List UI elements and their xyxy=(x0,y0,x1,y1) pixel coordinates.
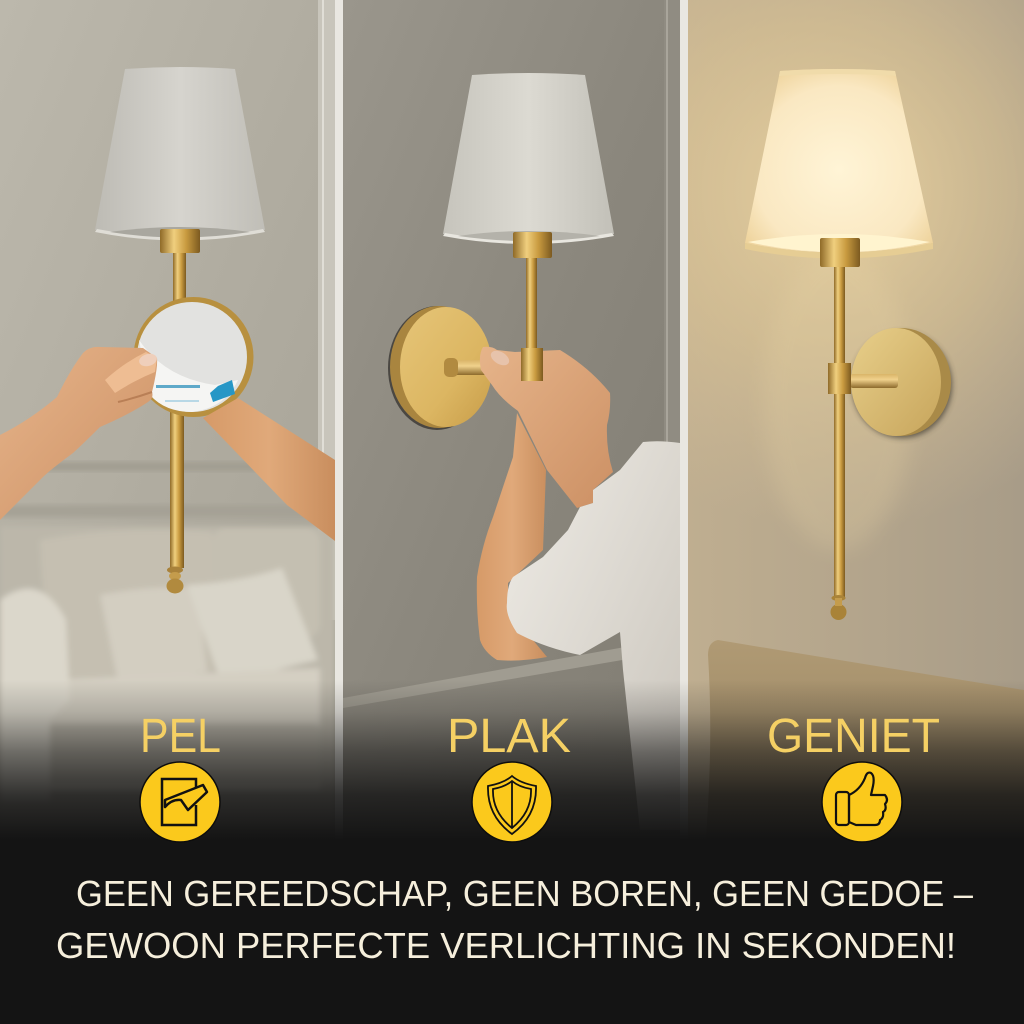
lamp 3 wall plate xyxy=(828,328,952,438)
label: PEL: PEL xyxy=(140,710,221,763)
panel: step 2 stick xyxy=(343,0,680,860)
icon: thumbs up xyxy=(822,762,902,842)
lamp 1 fixture rod xyxy=(160,229,200,594)
panel: step 1 peel xyxy=(0,0,335,860)
lamp 2 fixture rod xyxy=(513,232,552,350)
divider right xyxy=(680,0,688,860)
icon: shield xyxy=(472,762,552,842)
right arm xyxy=(203,398,335,541)
dark bottom band xyxy=(0,680,1024,1024)
forearm xyxy=(477,413,547,661)
clamp collar xyxy=(521,348,543,381)
lamp 3 fixture rod xyxy=(820,238,860,620)
wall plate xyxy=(388,306,495,430)
tagline xyxy=(56,873,973,966)
tagline: GEWOON PERFECTE VERLICHTING IN SEKONDEN! xyxy=(56,925,956,966)
icon: peel sticker xyxy=(140,762,220,842)
shirt xyxy=(507,441,680,830)
label: GENIET: GENIET xyxy=(767,710,940,763)
panel: step 3 enjoy xyxy=(688,0,1024,860)
sofa xyxy=(0,526,335,790)
divider left xyxy=(335,0,343,860)
hand attaching lamp xyxy=(480,347,613,508)
label: PLAK: PLAK xyxy=(447,710,571,763)
adhesive disc xyxy=(134,297,254,417)
lamp 1 shade xyxy=(95,67,265,240)
pillow xyxy=(708,640,1024,789)
tagline: GEEN GEREEDSCHAP, GEEN BOREN, GEEN GEDOE – xyxy=(76,873,973,914)
hand peeling sticker xyxy=(0,347,158,520)
lamp 2 shade xyxy=(443,73,614,244)
lit lamp shade xyxy=(745,69,933,258)
